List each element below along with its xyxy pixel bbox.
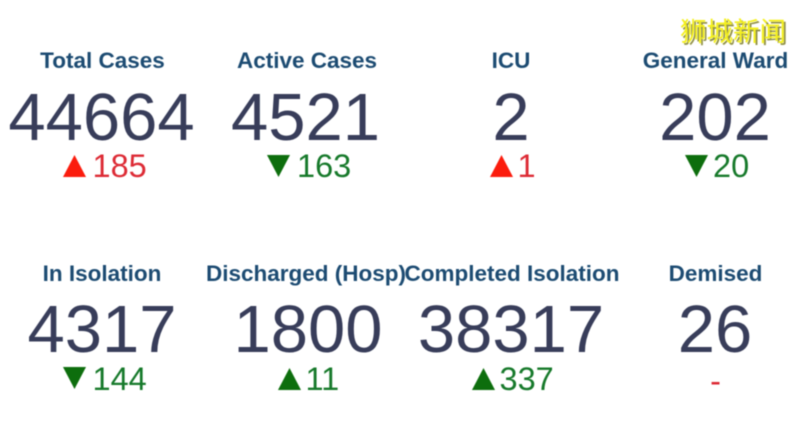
stat: discharged: 11: [306, 361, 339, 397]
stat: icu: [490, 48, 536, 184]
stat: total cases: 44664: [8, 80, 195, 155]
stat: active cases: Active Cases: [237, 48, 377, 73]
stat: in isolation: [27, 261, 177, 397]
stat: general ward: General Ward: [643, 48, 788, 73]
stat: active cases: 4521: [231, 80, 380, 155]
stat: active cases: 163: [297, 148, 351, 184]
stat: general ward: 20: [713, 148, 749, 184]
stat: completed isolation: Completed Isolation: [404, 261, 620, 286]
stat: demised: [669, 261, 762, 399]
stat: completed isolation: 337: [500, 361, 554, 397]
stat: active cases: [231, 48, 380, 184]
stat: total cases: [8, 48, 195, 184]
stat: icu: 1: [518, 148, 536, 184]
stat: completed isolation: [404, 261, 620, 397]
watermark logo: 狮城新闻: [680, 17, 786, 47]
stat: discharged: [206, 261, 406, 397]
stat: general ward: [643, 48, 788, 184]
stat: total cases: 185: [92, 148, 147, 184]
stat: in isolation: In Isolation: [43, 261, 161, 286]
stat: in isolation: 144: [92, 361, 147, 397]
stat: discharged: Discharged (Hosp): [206, 261, 406, 286]
stat: demised: -: [710, 363, 721, 399]
stat: total cases: Total Cases: [40, 48, 165, 73]
stat: icu: ICU: [492, 48, 530, 73]
stat: in isolation: 4317: [27, 292, 177, 367]
watermark logo: 狮城新闻: [682, 19, 788, 49]
stat: demised: 26: [678, 292, 752, 367]
stat: discharged: 1800: [233, 292, 383, 367]
stat: completed isolation: 38317: [418, 292, 604, 367]
stat: demised: Demised: [669, 261, 762, 286]
stat: general ward: 202: [659, 80, 771, 155]
stat: icu: 2: [492, 80, 530, 155]
